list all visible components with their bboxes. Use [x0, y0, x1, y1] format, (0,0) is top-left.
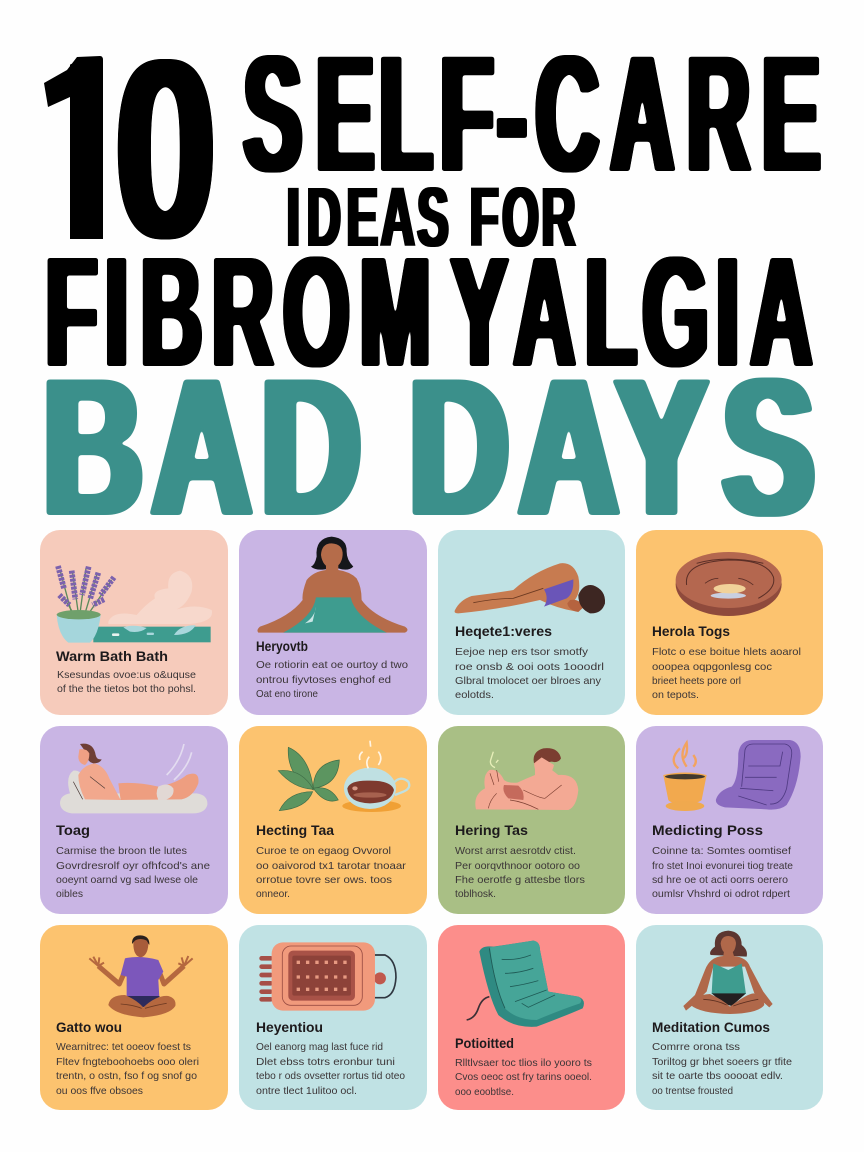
body text: brieet heets pore orl — [652, 675, 741, 687]
body text: Oat eno tirone — [256, 688, 318, 700]
body text: ontre tlect 1ulitoo ocl. — [256, 1085, 357, 1097]
body text: ooeynt oarnd vg sad lwese ole — [56, 874, 198, 886]
body text: oumlsr Vhshrd oi odrot rdpert — [652, 888, 790, 900]
heading: Meditation Cumos — [652, 1019, 770, 1035]
heading: Heyentiou — [256, 1019, 323, 1035]
title line: self-care: SELF-CARE — [244, 22, 820, 207]
body text: Flotc o ese boitue hlets aoarol — [652, 646, 801, 658]
body text — [455, 1057, 592, 1098]
body text: Glbral tmolocet oer blroes any — [455, 675, 602, 687]
body text — [57, 669, 196, 695]
body text — [652, 646, 801, 701]
body text — [652, 1041, 792, 1097]
panel: warm bath — [40, 530, 228, 715]
heading: Hecting Taa — [256, 822, 334, 838]
heading: Heqete1:veres — [455, 623, 552, 639]
body text: oibles — [56, 888, 83, 900]
body text: sit te oarte tbs ooooat edlv. — [652, 1070, 783, 1082]
heading: Medicting Poss — [652, 822, 763, 838]
body text: Curoe te on egaog Ovvorol — [256, 845, 391, 857]
body text — [56, 1041, 199, 1097]
panel: reclining person — [40, 726, 228, 914]
body text: roe onsb & ooi oots 1ooodrl — [455, 661, 604, 673]
icon: teal seat cushion with cord — [467, 941, 584, 1027]
body text: Rlltlvsaer toc tlios ilo yooro ts — [455, 1057, 592, 1069]
panel: meditating pass — [636, 726, 823, 914]
body text: onneor. — [256, 888, 290, 900]
body text — [256, 1041, 405, 1097]
body text: Toriltog gr bhet soeers gr tfite — [652, 1056, 792, 1068]
panel: resting pose — [438, 530, 625, 715]
body text: Dlet ebss totrs eronbur tuni — [256, 1056, 395, 1068]
icon: cross-legged man meditating — [89, 935, 193, 1017]
body text: Carmise the broon tle lutes — [56, 845, 187, 857]
icon: leaves and tea cup — [278, 741, 409, 812]
title line: bad days: BAD DAYS — [43, 338, 814, 558]
icon: seated woman meditating — [683, 931, 773, 1014]
heading: Toag — [56, 822, 90, 838]
body text — [652, 845, 793, 900]
icon: woman lying on cushion — [60, 744, 207, 813]
body text: sd hre oe ot acti oorrs oerero — [652, 874, 788, 886]
title — [31, 7, 820, 558]
panel: gentle stretching person — [239, 530, 427, 715]
icon: person massaging hand — [475, 748, 578, 810]
icon: person lying in child's pose — [455, 563, 605, 613]
body text — [56, 845, 210, 900]
title number 10: 0 — [114, 7, 217, 292]
icon: lavender pot and bath — [57, 566, 212, 643]
title number 10 — [44, 56, 213, 240]
body text: on tepots. — [652, 689, 699, 701]
panel: heating device — [239, 925, 427, 1110]
body text: Oe rotiorin eat oe ourtoy d two — [256, 659, 408, 671]
body text: orrotue tovre ser ows. toos — [256, 874, 392, 886]
icon: seated woman in teal — [257, 537, 407, 633]
panel: heat disc — [636, 530, 823, 715]
body text: oo oaivorod tx1 tarotar tnoaar — [256, 860, 407, 872]
heading: Hering Tas — [455, 822, 528, 838]
heading: Heryovtb — [256, 638, 308, 654]
heading: Gatto wou — [56, 1019, 122, 1035]
body text — [455, 646, 604, 701]
body text: Per oorqvthnoor ootoro oo — [455, 860, 580, 872]
body text — [256, 845, 407, 900]
heading: Herola Togs — [652, 623, 730, 639]
title number 10: 1 — [31, 9, 133, 294]
title line: fibromyalgia: FIBROMYALGIA — [45, 224, 812, 400]
panel: herbal tea — [239, 726, 427, 914]
panel: meditation cushion — [636, 925, 823, 1110]
panel: seated man — [40, 925, 228, 1110]
body text: Oel eanorg mag last fuce rid — [256, 1041, 383, 1053]
body text: Ksesundas ovoe:us o&uquse — [57, 669, 196, 681]
body text: of the the tietos bot tho pohsl. — [57, 683, 196, 695]
heading: Potioitted — [455, 1035, 514, 1051]
panel: heated chair pad — [438, 925, 625, 1110]
body text — [256, 659, 408, 700]
body text: oo trentse frousted — [652, 1085, 733, 1097]
body text — [455, 845, 585, 900]
body text: Coinne ta: Somtes oomtisef — [652, 845, 791, 857]
body text: Fhe oerotfe g attesbe tlors — [455, 874, 585, 886]
icon: hot drink and heating pad — [663, 740, 801, 811]
body text: ooo eoobtlse. — [455, 1086, 514, 1098]
body text: Fltev fngteboohoebs ooo oleri — [56, 1056, 199, 1068]
body text: ou oos ffve obsoes — [56, 1085, 143, 1097]
body text: eolotds. — [455, 689, 494, 701]
panel: hand massage — [438, 726, 625, 914]
body text: Comrre orona tss — [652, 1041, 740, 1053]
body text: Cvos oeoc ost fry tarins ooeol. — [455, 1071, 592, 1083]
icon: round brown cushion — [676, 552, 782, 616]
body text: toblhosk. — [455, 888, 496, 900]
body text: Govrdresrolf oyr ofhfcod's ane — [56, 860, 210, 872]
body text: trentn, o ostn, fso f og snof go — [56, 1070, 197, 1082]
body text: Wearnitrec: tet ooeov foest ts — [56, 1041, 191, 1053]
title line: ideas for: IDEAS FOR — [287, 169, 575, 265]
body text: ooopea oqpgonlesg coc — [652, 661, 772, 673]
icon: heating pad with controller — [262, 942, 396, 1011]
body text: fro stet Inoi evonurei tiog treate — [652, 860, 793, 872]
heading: Warm Bath Bath — [56, 648, 168, 664]
body text: tebo r ods ovsetter rortus tid oteo — [256, 1070, 405, 1082]
body text: Eejoe nep ers tsor smotfy — [455, 646, 589, 658]
body text: ontrou fiyvtoses enghof ed — [256, 674, 391, 686]
body text: Worst arrst aesrotdv ctist. — [455, 845, 576, 857]
